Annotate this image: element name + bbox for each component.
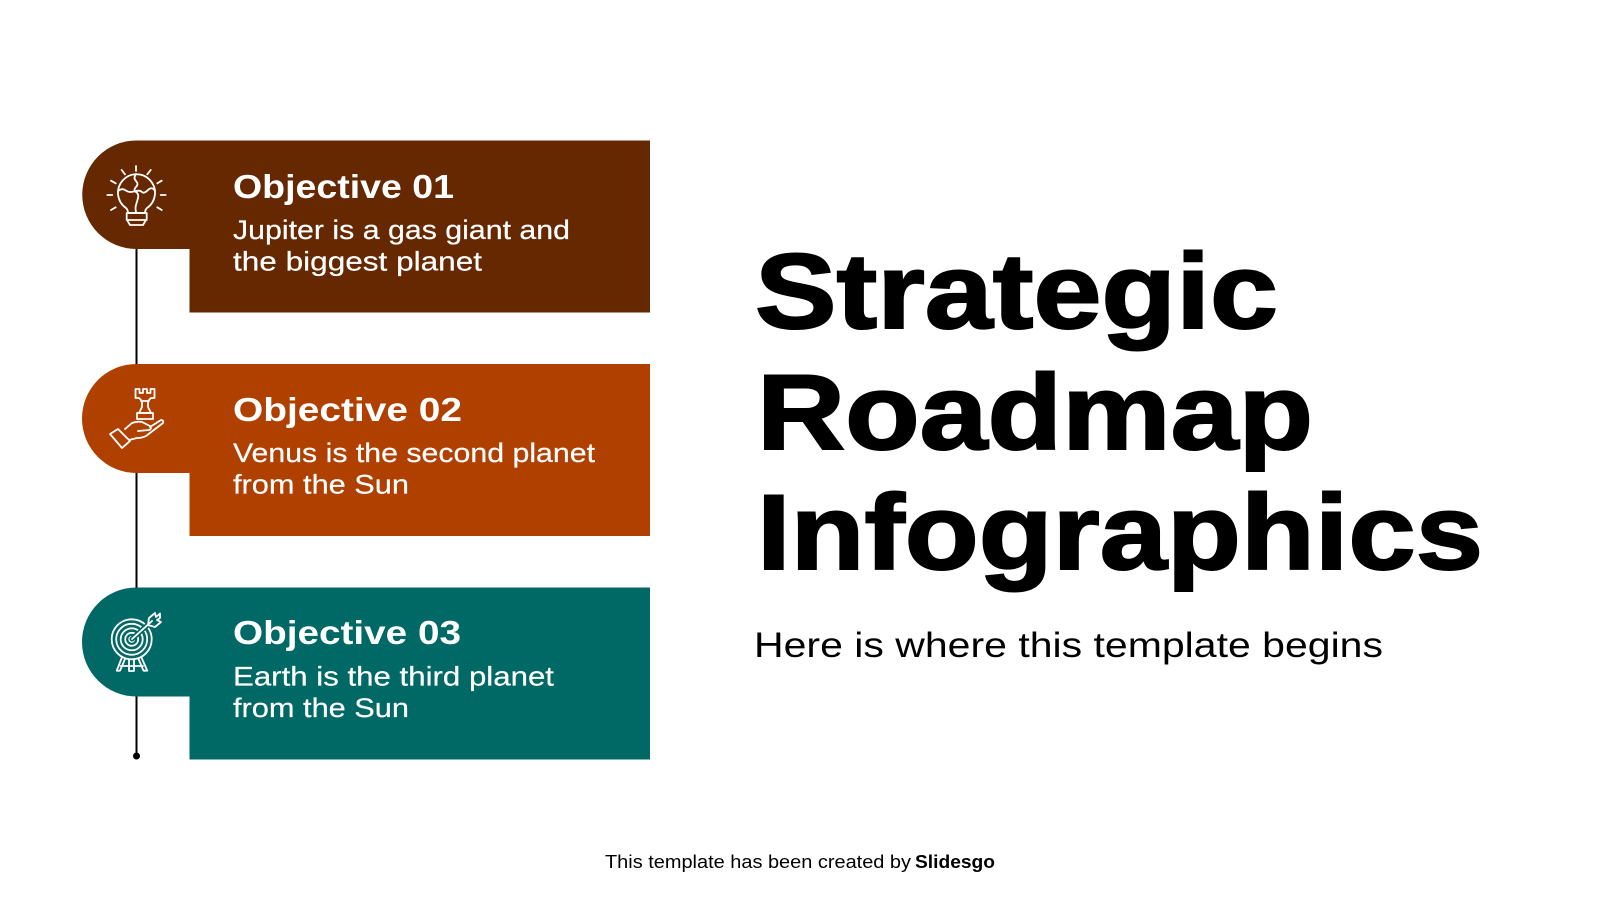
title xyxy=(755,231,1483,592)
icon: target with arrow xyxy=(112,613,161,671)
panel shape: objective 02 xyxy=(82,364,650,536)
description: objective 01 xyxy=(233,215,570,276)
title: Infographics xyxy=(757,472,1483,592)
description: objective 02: Venus is the second planet xyxy=(233,438,596,468)
heading: objective 02: Objective 02 xyxy=(233,391,462,428)
timeline connector xyxy=(133,240,140,760)
title: Roadmap xyxy=(757,352,1313,472)
description: objective 03: Earth is the third planet xyxy=(233,662,555,692)
description: objective 01: the biggest planet xyxy=(233,246,483,276)
panel shape: objective 03 xyxy=(82,588,650,760)
heading: objective 03: Objective 03 xyxy=(233,614,461,651)
footer credit: Slidesgo xyxy=(915,852,995,872)
icon: hand holding chess rook xyxy=(110,389,163,448)
title: Strategic xyxy=(755,231,1278,351)
panel shape: objective 01 xyxy=(82,140,650,312)
footer credit: This template has been created by xyxy=(605,852,911,872)
description: objective 02 xyxy=(233,438,596,500)
description: objective 03: from the Sun xyxy=(233,693,409,723)
description: objective 03 xyxy=(233,662,555,723)
panel: objective 03 xyxy=(82,588,650,760)
panel: objective 01 xyxy=(82,140,650,312)
panel: objective 02 xyxy=(82,364,650,536)
icon: light bulb with puzzle pieces xyxy=(107,166,166,225)
description: objective 01: Jupiter is a gas giant and xyxy=(233,215,570,245)
subtitle: Here is where this template begins xyxy=(754,626,1383,665)
heading: objective 01: Objective 01 xyxy=(233,168,454,205)
description: objective 02: from the Sun xyxy=(233,470,409,500)
